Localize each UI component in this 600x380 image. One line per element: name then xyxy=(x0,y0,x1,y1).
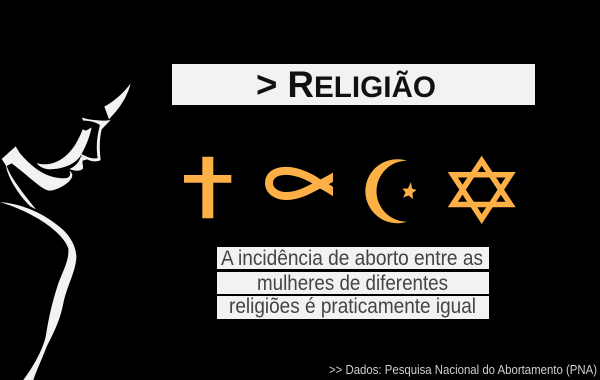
title text: > RELIGIÃO xyxy=(256,64,436,105)
icon: cross xyxy=(184,157,231,218)
text block: finding xyxy=(217,247,489,319)
shoulder and back stroke xyxy=(0,202,76,380)
brow and nose line xyxy=(81,118,111,161)
icon: star of David xyxy=(448,156,516,224)
lips xyxy=(69,156,87,171)
forehead spike xyxy=(104,83,131,119)
text line 2: mulheres de diferentes xyxy=(257,272,448,295)
jaw and collar stroke xyxy=(2,146,72,209)
icon: crescent and star xyxy=(365,159,416,223)
icon: ichthys fish xyxy=(269,171,337,196)
illustration: woman profile silhouette xyxy=(0,83,131,380)
cheek stroke xyxy=(37,127,92,169)
text line 3: religiões é praticamente igual xyxy=(229,295,476,318)
text line 1: A incidência de aborto entre as xyxy=(221,247,483,270)
title banner xyxy=(172,64,535,105)
